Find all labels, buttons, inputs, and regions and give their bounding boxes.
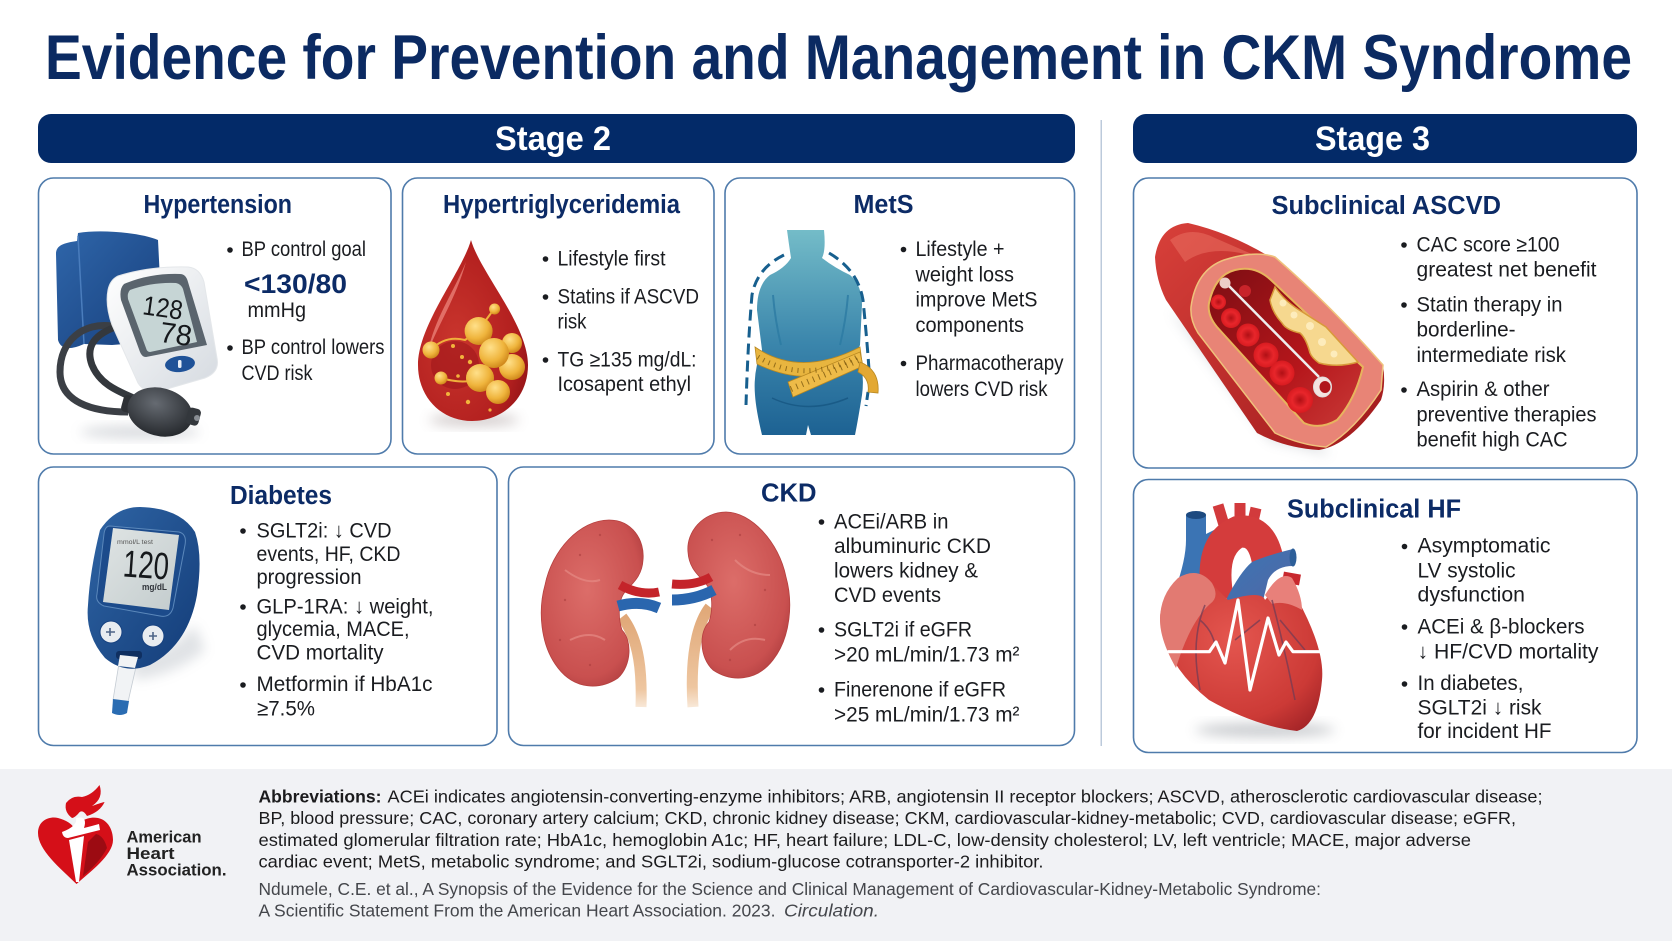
logo: American Heart Association: Heart [126,845,175,863]
text block: subclinical HF points: Asymptomatic [1418,534,1550,558]
heading: Hypertension: Hypertension [144,191,292,219]
text block: abbreviations [258,786,1542,872]
text block: diabetes points: Metformin if HbA1c [256,673,432,696]
text block: CKD points: SGLT2i if eGFR [834,618,972,642]
text block: diabetes points: ≥7.5% [257,698,315,720]
panel: CKD [508,467,1074,746]
heading bar: Stage 2: Stage 2 [495,120,611,158]
text block: citation: A Scientific Statement From the American Heart Association. 2023. [258,900,776,920]
heading: Diabetes: Diabetes [230,482,332,510]
text block: subclinical ASCVD points: CAC score ≥100 [1416,234,1560,256]
heading: Hypertriglyceridemia: Hypertriglyceridemia [443,191,681,219]
text block: citation [258,879,1321,920]
text block: subclinical ASCVD points: borderline- [1416,318,1516,342]
text block: subclinical ASCVD points: Statin therapy in [1416,294,1562,316]
text block: hypertriglyceridemia points: Icosapent ethyl [558,373,691,396]
text block: citation: Circulation. [784,900,879,920]
text block: CKD points: CVD events [834,584,941,607]
text block: hypertension points [227,238,384,385]
text block: hypertriglyceridemia points: Statins if ASCVD [558,286,699,308]
panel: Diabetes [38,467,497,746]
text block: hypertension points: <130/80 [244,269,347,299]
text block: subclinical ASCVD points: intermediate risk [1416,344,1566,367]
logo: American Heart Association [38,785,226,884]
text block: hypertension points: mmHg [248,299,306,322]
text block: subclinical HF points: In diabetes, [1418,672,1524,695]
text block: hypertriglyceridemia points: Lifestyle first [558,248,666,270]
panel: Hypertriglyceridemia [402,178,714,454]
text block: subclinical HF points: for incident HF [1418,720,1552,743]
icon: kidneys [541,512,790,707]
icon: glucose meter: mg/dL [142,582,167,592]
text block: CKD points: Finerenone if eGFR [834,678,1006,702]
text block: subclinical HF points: ACEi & β-blockers [1418,616,1584,638]
logo: American Heart Association: American [126,828,202,846]
text block: diabetes points: events, HF, CKD [256,543,400,566]
heading: CKD: CKD [761,480,816,508]
heading: Subclinical ASCVD: Subclinical ASCVD [1272,192,1501,220]
icon: glucose meter: mmol/L test [117,540,153,546]
text block: subclinical HF points: ↓ HF/CVD mortality [1418,640,1599,664]
text block: hypertension points: BP control lowers [242,336,384,359]
panel: Hypertension [38,178,391,454]
text block: subclinical HF points: SGLT2i ↓ risk [1418,696,1542,720]
text block: MetS points: Pharmacotherapy [916,352,1064,375]
heading bar: Stage 3 [1133,114,1637,163]
text block: diabetes points: CVD mortality [256,642,384,664]
icon: glucose meter [88,507,205,715]
text block: subclinical ASCVD points: preventive therapies [1416,404,1596,426]
text block: diabetes points: progression [256,566,362,589]
text block: CKD points: ACEi/ARB in [834,510,948,534]
text block: diabetes points: GLP-1RA: ↓ weight, [256,596,434,618]
text block: subclinical ASCVD points: greatest net benefit [1416,258,1597,282]
logo: American Heart Association: Association. [126,862,226,880]
text block: subclinical HF points [1402,534,1599,743]
icon: body silhouette with measuring tape [746,230,878,435]
text block: subclinical ASCVD points: benefit high CAC [1416,428,1568,452]
text block: MetS points: components [916,314,1024,337]
footer panel [0,769,1672,941]
icon: blood pressure monitor: 128 [141,290,185,326]
icon: blood pressure monitor [56,231,218,444]
text block: subclinical ASCVD points: Aspirin & other [1416,378,1550,401]
icon: glucose meter: 120 [122,543,170,589]
text block: hypertriglyceridemia points [543,248,699,396]
icon: artery cross-section with plaque [1155,223,1384,455]
text block: diabetes points: SGLT2i: ↓ CVD [256,520,392,542]
text block: MetS points: lowers CVD risk [916,378,1048,401]
text block: diabetes points: glycemia, MACE, [256,618,410,641]
text block: MetS points: improve MetS [916,288,1038,312]
icon: blood drop with fat globules [418,240,528,426]
text block: MetS points: weight loss [915,264,1014,286]
text block: hypertension points: CVD risk [242,362,313,385]
icon: blood pressure monitor: 78 [158,317,194,353]
heading: Subclinical HF: Subclinical HF [1287,496,1461,524]
panel: Subclinical ASCVD [1134,178,1637,468]
text block: abbreviations: cardiac event; MetS, metabolic syndrome; and SGLT2i, sodium-glucose cotransporter-2 inhibitor. [258,852,1044,872]
text block: citation: Ndumele, C.E. et al., A Synopsis of the Evidence for the Science and Clinical Management of Cardiovascular-Kidney-Metabolic Syndrome: [258,879,1321,899]
heading: MetS: MetS [854,191,914,219]
heading bar: Stage 3: Stage 3 [1315,120,1430,158]
panel: MetS [725,178,1074,454]
text block: CKD points: lowers kidney & [834,560,978,582]
text block: abbreviations: BP, blood pressure; CAC, coronary artery calcium; CKD, chronic kidney disease; CKM, cardiovascular-kidney-metabolic; CVD, cardiovascular disease; eGFR, [258,808,1516,828]
text block: diabetes points [240,520,434,720]
text block: CKD points [819,510,1020,726]
text block: hypertriglyceridemia points: risk [558,310,587,334]
heading bar: Stage 2 [38,114,1075,163]
text block: hypertension points: BP control goal [242,238,366,261]
text block: CKD points: albuminuric CKD [834,535,991,558]
text block: CKD points: >20 mL/min/1.73 m² [834,644,1020,666]
text block: abbreviations: estimated glomerular filtration rate; HbA1c, hemoglobin A1c; HF, heart failure; LDL-C, low-density cholesterol; LV, left ventricle; MACE, major adverse [258,830,1471,850]
text block: MetS points [901,238,1064,401]
text block: CKD points: >25 mL/min/1.73 m² [834,704,1020,726]
text block: subclinical HF points: LV systolic [1418,560,1516,582]
text block: MetS points: Lifestyle + [916,238,1004,261]
text block: abbreviations: Abbreviations: [258,786,382,806]
icon: heart with ECG line [1160,503,1335,737]
text block: subclinical ASCVD points [1401,234,1597,452]
text block: abbreviations: ACEi indicates angiotensin-converting-enzyme inhibitors; ARB, angiotensin II receptor blockers; ASCVD, atherosclerotic cardiovascular disease; [388,786,1542,806]
text block: subclinical HF points: dysfunction [1418,584,1525,606]
text block: hypertriglyceridemia points: TG ≥135 mg/dL: [558,348,696,372]
icon: ECG trace [1168,600,1322,690]
panel: Subclinical HF [1134,480,1637,752]
